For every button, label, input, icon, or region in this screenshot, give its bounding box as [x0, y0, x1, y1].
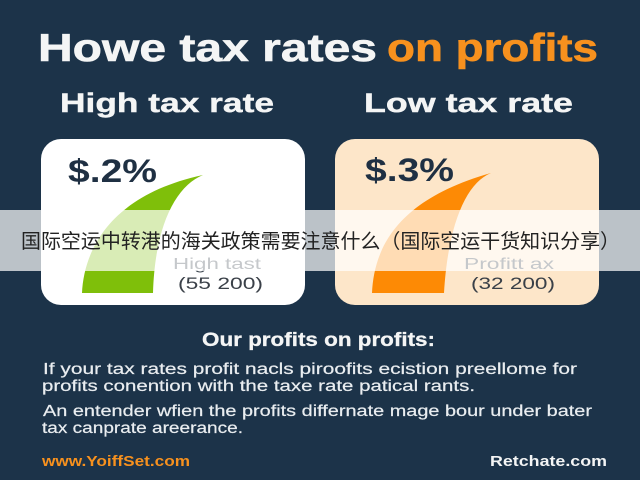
panel: low tax rate: [335, 139, 599, 305]
value: high rate: $.2%: [68, 153, 157, 189]
body paragraph 1: [42, 361, 577, 395]
amount: high: (55 200): [178, 274, 263, 293]
title: Howe tax rates: [38, 27, 377, 70]
value: low rate: $.3%: [365, 152, 454, 188]
footer right link: Retchate.com: [490, 454, 607, 470]
chart: orange curved bar: [372, 173, 491, 293]
label: profitt ax: Profitt ax: [464, 256, 554, 273]
overlay banner: [0, 210, 640, 271]
heading: high tax rate: High tax rate: [60, 88, 274, 118]
title: [38, 27, 598, 70]
section heading: Our profits on profits:: [202, 330, 435, 351]
label: high tast: High tast: [173, 256, 262, 273]
body paragraph 2: An entender wfien the profits differnate mage bour under bater: [43, 403, 592, 420]
banner text: 国际空运中转港的海关政策需要注意什么（国际空运干货知识分享）: [21, 230, 620, 253]
heading: low tax rate: Low tax rate: [364, 88, 573, 118]
amount: low: (32 200): [471, 274, 555, 293]
chart: green curved bar: [82, 175, 203, 293]
body paragraph 1: profits conention with the taxe rate patical rants.: [42, 378, 475, 395]
footer left link: www.YoiffSet.com: [41, 454, 190, 470]
panel: high tax rate: [41, 139, 305, 305]
body paragraph 2: [42, 403, 592, 437]
title: on profits: [387, 27, 598, 70]
body paragraph 2: tax canprate areerance.: [42, 420, 243, 437]
body paragraph 1: If your tax rates profit nacls piroofits ecistion preellome for: [43, 361, 577, 378]
